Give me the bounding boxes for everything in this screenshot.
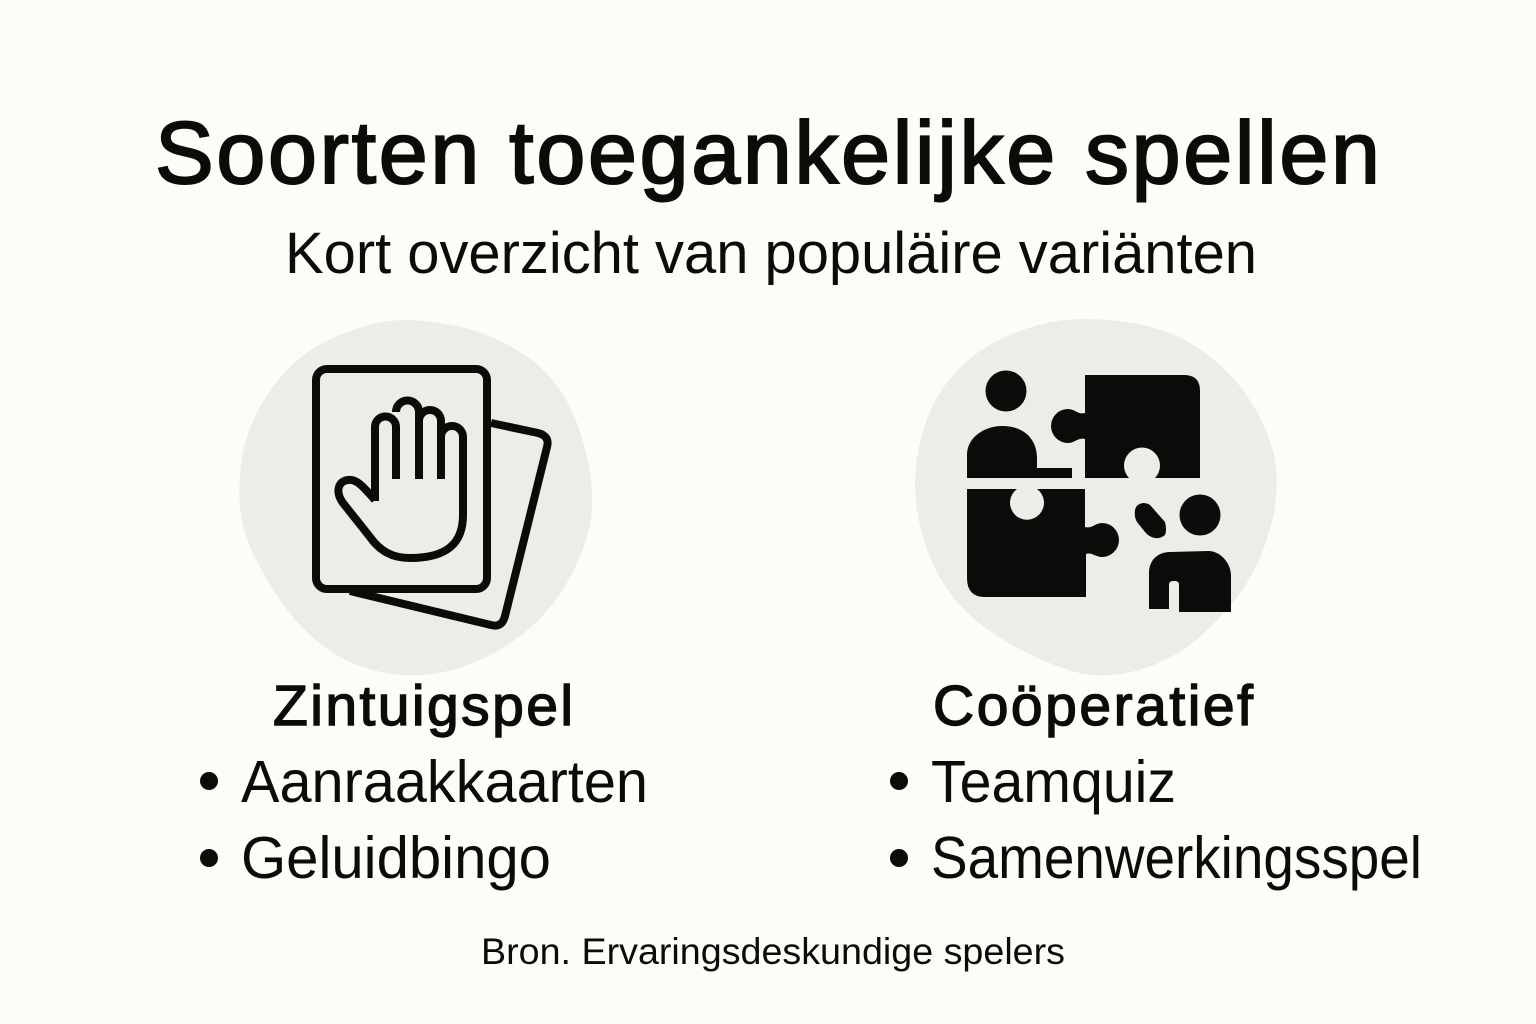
person two bbox=[1149, 494, 1231, 612]
heading: Zintuigspel: Zintuigspel bbox=[273, 674, 573, 738]
icon: people and puzzle pieces bbox=[915, 319, 1277, 675]
heading: Coöperatief: Coöperatief bbox=[933, 674, 1253, 738]
icon background blob bbox=[239, 320, 592, 675]
subtitle: Kort overzicht van populäire variänten bbox=[285, 221, 1257, 286]
source line: Bron. Ervaringsdeskundige spelers bbox=[481, 931, 1065, 972]
icon background blob bbox=[915, 319, 1277, 675]
front card bbox=[316, 369, 487, 589]
puzzle piece bottom left bbox=[967, 489, 1119, 597]
list item: Aanraakkaarten: Aanraakkaarten bbox=[241, 749, 648, 815]
panel: Zintuigspel bbox=[200, 320, 648, 891]
icon: hand on cards bbox=[239, 320, 592, 675]
list item: Geluidbingo: Geluidbingo bbox=[241, 825, 551, 891]
puzzle piece top right bbox=[1051, 375, 1200, 478]
list item: Samenwerkingsspel: Samenwerkingsspel bbox=[931, 825, 1422, 891]
person one bbox=[967, 370, 1072, 478]
list item: Teamquiz: Teamquiz bbox=[931, 749, 1176, 815]
small puzzle fragment bbox=[1135, 503, 1166, 538]
panel: Coöperatief bbox=[890, 319, 1422, 891]
hand bbox=[338, 400, 463, 558]
back card bbox=[350, 423, 548, 626]
title: Soorten toegankelijke spellen bbox=[155, 103, 1380, 202]
